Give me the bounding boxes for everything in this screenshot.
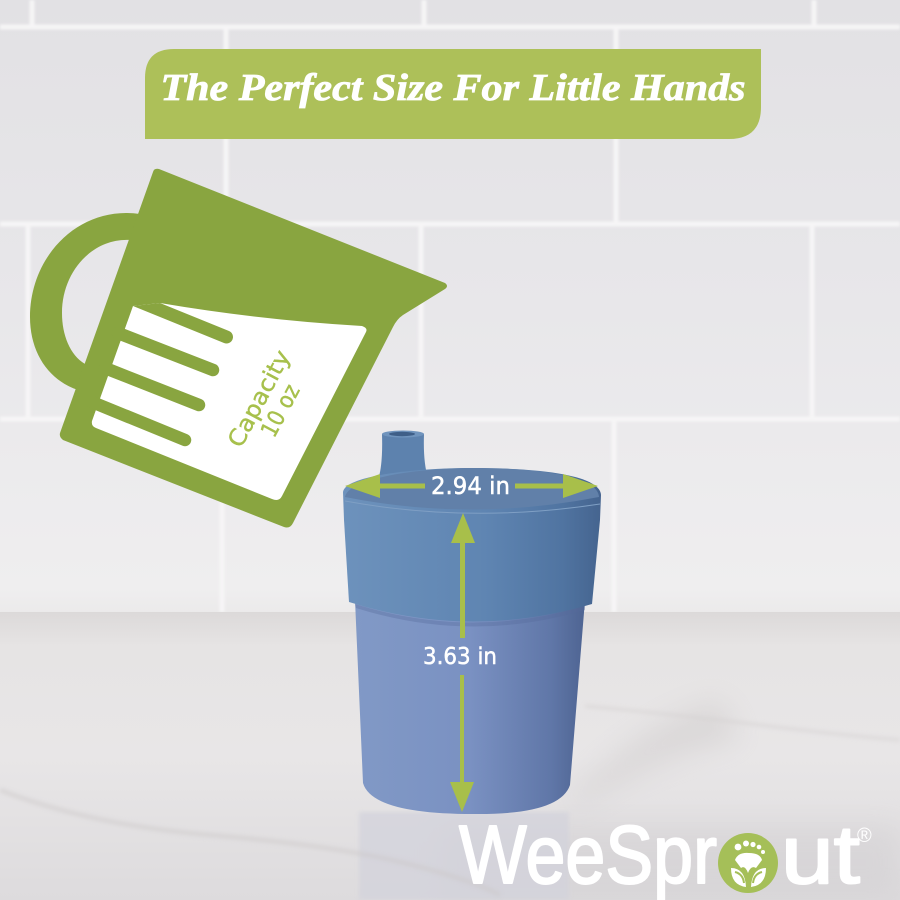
lid top surface [345,468,599,510]
background: marble counter top [0,612,900,900]
icon: measuring jug [30,169,447,528]
jug gradations [92,303,233,440]
cup photo [343,430,601,814]
cup body [355,600,585,814]
capacity label: Capacity [223,346,296,452]
logo emblem [718,833,778,893]
height dimension arrow [423,513,497,812]
brand logo: ® [857,825,872,847]
lid shadow on body [355,604,585,627]
brand logo: WeeSpr [459,808,717,900]
banner [145,49,761,139]
background: tiled wall [0,0,900,620]
icon: measuring jug: 10 oz [256,380,306,442]
height label: 3.63 in [423,644,497,670]
jug liquid window [92,303,366,500]
width label: 2.94 in [431,472,510,500]
jug body [60,169,447,528]
banner title: The Perfect Size For Little Hands [160,67,746,109]
lid [343,468,601,622]
width dimension arrow [345,472,598,500]
jug handle [30,213,140,390]
brand logo: ut [781,808,860,900]
spout [378,434,428,480]
